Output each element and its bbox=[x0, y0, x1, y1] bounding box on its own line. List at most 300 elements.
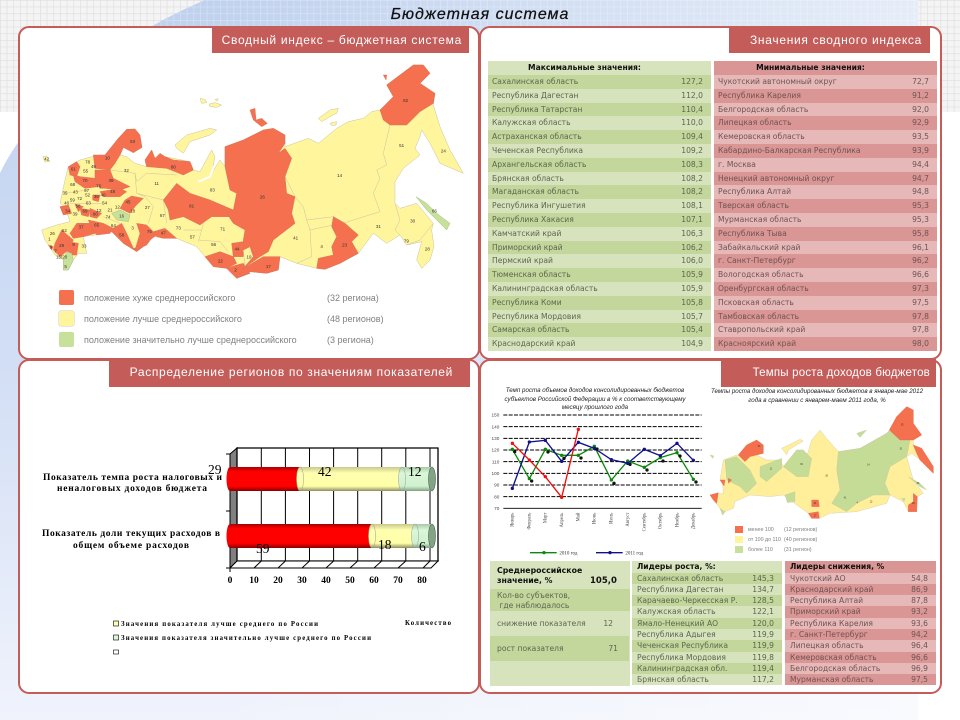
table: maximum values bbox=[488, 61, 711, 351]
table: decline leaders: 54,8 bbox=[911, 574, 928, 582]
map of Russia: composite index: 7 bbox=[54, 249, 57, 254]
map of Russia: composite index: 23 bbox=[342, 243, 348, 248]
table: minimum values: Белгородская область bbox=[718, 105, 808, 114]
table: maximum values: Приморский край bbox=[492, 243, 563, 252]
line chart: monthly revenue growth: Июль bbox=[610, 513, 615, 524]
map of Russia: composite index: 67 bbox=[160, 213, 165, 218]
table: minimum values: 92,0 bbox=[912, 105, 929, 114]
line chart: monthly revenue growth: 150 bbox=[492, 413, 500, 418]
table: maximum values: 110,0 bbox=[681, 118, 703, 127]
table: maximum values: Республика Коми bbox=[492, 298, 562, 307]
bar chart: distribution of regions: Значения показателя лучше среднего по России bbox=[121, 621, 318, 628]
table: minimum values: Забайкальский край bbox=[718, 243, 800, 252]
bar chart: distribution of regions: Значения показателя значительно лучше среднего по России bbox=[121, 635, 371, 642]
table: minimum values: г. Москва bbox=[718, 160, 756, 169]
map of Russia: composite index: 79 bbox=[404, 239, 409, 244]
table: decline leaders: г. Санкт-Петербург bbox=[790, 630, 868, 639]
chart title: growth map: года в сравнении с январем-маем 2011 года, % bbox=[748, 397, 886, 404]
table: maximum values: 105,7 bbox=[681, 312, 703, 321]
table: maximum values: Республика Ингушетия bbox=[492, 201, 586, 210]
subjects row: где наблюдалось bbox=[499, 600, 569, 610]
table: decline leaders: 93,6 bbox=[911, 619, 928, 628]
map of Russia: composite index: 30 bbox=[410, 218, 416, 223]
line chart: monthly revenue growth: 100 bbox=[492, 471, 500, 476]
increase row bbox=[490, 636, 629, 661]
map of Russia: revenue growth: 26 bbox=[825, 476, 829, 478]
map of Russia: composite index: 12 bbox=[96, 208, 102, 213]
map of Russia: revenue growth: 53 bbox=[758, 446, 761, 448]
table: maximum values: 105,9 bbox=[681, 270, 703, 279]
map of Russia: composite index: 24 bbox=[441, 149, 446, 154]
map of Russia: composite index: 64 bbox=[111, 223, 116, 228]
table: maximum values: Максимальные значения: bbox=[528, 63, 641, 72]
heading: composite index: Сводный индекс – бюджетная система bbox=[222, 33, 462, 47]
map of Russia: composite index: 11 bbox=[154, 181, 159, 186]
table: maximum values: Астраханская область bbox=[492, 132, 582, 141]
map of Russia: composite index: 22 bbox=[218, 258, 223, 263]
map of Russia: revenue growth: 66 bbox=[917, 483, 920, 485]
table: maximum values: 109,4 bbox=[681, 132, 703, 141]
table: decline leaders: Краснодарский край bbox=[790, 585, 873, 594]
table: maximum values: Тюменская область bbox=[492, 270, 571, 279]
chart title: monthly growth: месяцу прошлого года bbox=[562, 404, 628, 411]
table: decline leaders: Приморский край bbox=[790, 607, 861, 616]
table: minimum values: 96,6 bbox=[912, 270, 929, 279]
table: minimum values: Республика Алтай bbox=[718, 187, 791, 196]
line chart: monthly revenue growth: Декабрь bbox=[692, 513, 697, 529]
table: minimum values: 93,9 bbox=[912, 146, 929, 155]
map of Russia: composite index: 8 bbox=[72, 242, 75, 247]
table: maximum values: Камчатский край bbox=[492, 229, 561, 238]
table: decline leaders: Белгородская область bbox=[790, 664, 880, 673]
count: above 110: (31 регион) bbox=[784, 547, 812, 553]
map of Russia: composite index: 5 bbox=[64, 264, 67, 269]
table: growth leaders: Карачаево-Черкесская Р. bbox=[637, 596, 738, 605]
table: maximum values: Магаданская область bbox=[492, 187, 579, 196]
table: decline leaders: Чукотский АО bbox=[790, 574, 846, 582]
table: growth leaders: Калужская область bbox=[637, 607, 716, 616]
table: growth leaders: 145,3 bbox=[752, 574, 774, 582]
map of Russia: composite index: 3 bbox=[131, 225, 134, 230]
table: decline leaders: 86,9 bbox=[911, 585, 928, 594]
map of Russia: composite index: 82 bbox=[403, 98, 409, 103]
map of Russia: composite index: 39 bbox=[72, 212, 78, 217]
table: minimum values: Липецкая область bbox=[718, 118, 792, 127]
table: decline leaders: 93,2 bbox=[911, 607, 928, 616]
table: growth leaders: Калининградская обл. bbox=[637, 664, 727, 673]
bar chart: distribution of regions: 59 bbox=[256, 541, 270, 556]
table: decline leaders: Республика Карелия bbox=[790, 619, 873, 628]
swatch: below 100 bbox=[735, 526, 743, 533]
table: maximum values: 106,0 bbox=[681, 256, 703, 265]
average heading bbox=[497, 566, 582, 585]
map of Russia: composite index: 9 bbox=[50, 245, 53, 250]
map of Russia: revenue growth: 4 bbox=[857, 502, 859, 504]
map of Russia: composite index: 39 bbox=[108, 178, 114, 183]
legend count: worse: (32 региона) bbox=[327, 293, 379, 303]
legend swatch: worse bbox=[59, 290, 74, 305]
table: growth leaders: Брянская область bbox=[637, 675, 709, 684]
table: decline leaders: 96,9 bbox=[911, 664, 928, 673]
line chart: monthly revenue growth: Апрель bbox=[560, 513, 565, 527]
line chart: monthly revenue growth: Февраль bbox=[528, 513, 533, 529]
legend swatch: better bbox=[59, 311, 74, 326]
map of Russia: composite index: 47 bbox=[161, 231, 166, 236]
table: growth leaders bbox=[632, 561, 782, 685]
table: growth leaders: Республика Адыгея bbox=[637, 630, 716, 639]
map of Russia: revenue growth: 28 bbox=[912, 503, 915, 505]
map of Russia: composite index: 34 bbox=[65, 208, 71, 213]
table: growth leaders: Республика Дагестан bbox=[637, 585, 723, 594]
table: minimum values: Кабардино-Балкарская Республика bbox=[718, 146, 861, 155]
text: below 100: менее 100 bbox=[748, 527, 774, 533]
growth map legend bbox=[735, 526, 817, 553]
map of Russia: revenue growth bbox=[710, 406, 934, 519]
table: minimum values: Республика Тыва bbox=[718, 229, 787, 238]
map of Russia: composite index: 68 bbox=[70, 182, 76, 187]
line chart: monthly revenue growth: 130 bbox=[492, 436, 500, 441]
bar chart: distribution of regions: общем объеме расходов bbox=[73, 540, 189, 551]
map of Russia: composite index: 4 bbox=[320, 244, 323, 249]
table: growth leaders: 119,9 bbox=[752, 641, 774, 650]
map of Russia: composite index: 49 bbox=[91, 164, 96, 169]
map of Russia: composite index: 58 bbox=[75, 203, 81, 208]
text: 100 to 110: от 100 до 110 bbox=[748, 537, 781, 543]
line chart: monthly revenue growth bbox=[492, 413, 702, 556]
table: maximum values: Сахалинская область bbox=[492, 77, 578, 86]
map of Russia: composite index: 59 bbox=[70, 198, 75, 203]
map of Russia: composite index: 48 bbox=[110, 189, 116, 194]
chart title: monthly growth bbox=[504, 387, 686, 411]
map of Russia: composite index: 1 bbox=[48, 236, 51, 241]
table: maximum values: Архангельская область bbox=[492, 160, 586, 169]
map of Russia: composite index: 35 bbox=[62, 190, 68, 195]
table: minimum values: 91,2 bbox=[912, 91, 929, 100]
map of Russia: composite index: 45 bbox=[125, 199, 131, 204]
table: minimum values: Республика Карелия bbox=[718, 91, 801, 100]
table: decline leaders: 97,5 bbox=[911, 675, 928, 684]
count: below 100: (12 регионов) bbox=[784, 527, 817, 533]
map of Russia: composite index: 76 bbox=[96, 184, 102, 189]
swatch: above 110 bbox=[735, 546, 743, 553]
average heading: значение, % bbox=[497, 576, 552, 585]
map of Russia: composite index: 78 bbox=[85, 159, 91, 164]
line chart: monthly revenue growth: 80 bbox=[494, 494, 500, 499]
map of Russia: composite index: 12 bbox=[115, 204, 120, 209]
line chart: monthly revenue growth: 90 bbox=[494, 483, 500, 488]
heading: distribution: Распределение регионов по значениям показателей bbox=[130, 365, 453, 379]
table: minimum values: Тверская область bbox=[718, 201, 789, 210]
panel: distribution of regions bbox=[18, 359, 480, 694]
table: minimum values: Ненецкий автономный округ bbox=[718, 174, 834, 183]
table: decline leaders: Липецкая область bbox=[790, 641, 864, 650]
map of Russia: composite index: 69 bbox=[82, 209, 88, 214]
line chart: monthly revenue growth: 2010 год bbox=[559, 551, 578, 556]
bar chart: distribution of regions: 42 bbox=[318, 464, 332, 479]
map of Russia: composite index: 55 bbox=[83, 168, 89, 173]
table: maximum values: 106,3 bbox=[681, 229, 703, 238]
map of Russia: composite index: 26 bbox=[260, 195, 265, 200]
map of Russia: revenue growth: 23 bbox=[870, 502, 873, 504]
table: minimum values: 94,4 bbox=[912, 160, 929, 169]
table: minimum values: Псковская область bbox=[718, 298, 794, 307]
map of Russia: composite index: 32 bbox=[124, 168, 129, 173]
table: maximum values: 108,3 bbox=[681, 160, 703, 169]
map of Russia: composite index: 71 bbox=[220, 227, 226, 232]
table: growth leaders: 120,0 bbox=[752, 619, 774, 628]
table: decline leaders: 94,2 bbox=[911, 630, 928, 639]
table: maximum values: 108,2 bbox=[681, 174, 703, 183]
table: maximum values: 104,9 bbox=[681, 339, 703, 348]
table: maximum values: Республика Татарстан bbox=[492, 105, 582, 114]
map of Russia: composite index: 56 bbox=[211, 242, 217, 247]
bar chart: distribution of regions: Показатель темпа роста налоговых и bbox=[43, 473, 223, 483]
table: maximum values: Чеченская Республика bbox=[492, 146, 583, 155]
map of Russia: composite index: 52 bbox=[85, 192, 91, 197]
table: decline leaders: 96,4 bbox=[911, 641, 928, 650]
chart title: growth map bbox=[711, 388, 923, 404]
table: growth leaders: Сахалинская область bbox=[637, 574, 723, 582]
table: maximum values: 106,2 bbox=[681, 243, 703, 252]
map of Russia: composite index: 51 bbox=[399, 143, 405, 148]
table: maximum values: Краснодарский край bbox=[492, 339, 575, 348]
map of Russia: composite index: 26 bbox=[50, 231, 55, 236]
panel: budget revenue growth bbox=[479, 359, 942, 694]
map of Russia: composite index: 73 bbox=[176, 225, 181, 230]
table: minimum values: Чукотский автономный округ bbox=[718, 77, 837, 86]
table: minimum values: 96,2 bbox=[912, 256, 929, 265]
line chart: monthly revenue growth: Май bbox=[577, 512, 582, 521]
table: maximum values: Калининградская область bbox=[492, 284, 598, 293]
summary box: average value bbox=[490, 561, 630, 686]
map of Russia: composite index: 61 bbox=[71, 167, 76, 172]
table: minimum values: 95,8 bbox=[912, 229, 929, 238]
table: maximum values: 107,1 bbox=[681, 215, 703, 224]
legend text: worse: положение хуже среднероссийского bbox=[84, 293, 235, 303]
heading: revenue growth: Темпы роста доходов бюджетов bbox=[753, 367, 930, 379]
legend count: better: (48 регионов) bbox=[327, 314, 384, 324]
count: 100 to 110: (40 регионов) bbox=[784, 537, 817, 543]
bar chart: distribution of regions: 40 bbox=[321, 576, 331, 586]
table: decline leaders: 96,6 bbox=[911, 653, 928, 662]
bar chart: distribution of regions: 12 bbox=[408, 464, 422, 479]
map of Russia: composite index: 17 bbox=[266, 264, 271, 269]
map of Russia: composite index: 27 bbox=[145, 205, 150, 210]
map of Russia: revenue growth: 44 bbox=[814, 503, 817, 505]
swatch: 100 to 110 bbox=[735, 536, 743, 543]
table: growth leaders: 119,9 bbox=[752, 630, 774, 639]
table: growth leaders: 119,4 bbox=[752, 664, 774, 673]
panel: index values bbox=[479, 26, 942, 360]
table: minimum values: 94,8 bbox=[912, 187, 929, 196]
map of Russia: composite index: 2 bbox=[234, 267, 237, 272]
bar chart: distribution of regions: Показатель доли текущих расходов в bbox=[42, 529, 220, 539]
text: above 110: более 110 bbox=[748, 547, 773, 553]
table: maximum values: 112,0 bbox=[681, 91, 703, 100]
table: decline leaders bbox=[785, 561, 936, 685]
map of Russia: revenue growth: 82 bbox=[901, 425, 904, 427]
table: growth leaders: Ямало-Ненецкий АО bbox=[637, 619, 718, 628]
table: minimum values: Мурманская область bbox=[718, 215, 802, 224]
line chart: monthly revenue growth: Август bbox=[626, 513, 631, 527]
map of Russia: composite index: 80 bbox=[171, 164, 176, 169]
map of Russia: composite index: 72 bbox=[77, 196, 83, 201]
table: minimum values: 95,3 bbox=[912, 215, 929, 224]
table: minimum values: 92,9 bbox=[912, 118, 929, 127]
table: growth leaders: 117,2 bbox=[752, 675, 774, 684]
map of Russia: composite index: 97 bbox=[84, 188, 90, 193]
chart title: monthly growth: субъектов Российской Федерации в % к соответствующему bbox=[504, 396, 686, 402]
heading: distribution bbox=[109, 358, 470, 387]
map of Russia: revenue growth: 17 bbox=[814, 516, 817, 518]
table: minimum values: 98,0 bbox=[912, 339, 929, 348]
bar chart: distribution of regions: 80 bbox=[417, 576, 427, 586]
legend text: much better: положение значительно лучше среднероссийского bbox=[84, 335, 297, 345]
table: minimum values: Оренбургская область bbox=[718, 284, 809, 293]
table: maximum values: 105,8 bbox=[681, 298, 703, 307]
average value: 105,0 bbox=[590, 576, 617, 586]
line chart: monthly revenue growth: Январь bbox=[511, 513, 516, 527]
bar chart: distribution of regions: 50 bbox=[345, 576, 355, 586]
table: maximum values: Брянская область bbox=[492, 174, 564, 183]
table: minimum values: 97,8 bbox=[912, 325, 929, 334]
decrease row: снижение показателя bbox=[497, 619, 586, 628]
bar chart: distribution of regions: 70 bbox=[393, 576, 403, 586]
average heading: Среднероссийское bbox=[497, 566, 582, 575]
table: maximum values: 110,4 bbox=[681, 105, 703, 114]
line chart: monthly revenue growth: 2011 год bbox=[625, 551, 644, 556]
map of Russia: revenue growth: 81 bbox=[800, 464, 804, 466]
table: growth leaders: Чеченская Республика bbox=[637, 641, 728, 650]
table: decline leaders: Кемеровская область bbox=[790, 653, 877, 662]
line chart: monthly revenue growth: 110 bbox=[492, 459, 500, 464]
table: minimum values: 97,8 bbox=[912, 312, 929, 321]
heading: composite index bbox=[212, 28, 469, 53]
legend count: much better: (3 региона) bbox=[327, 335, 374, 345]
table: maximum values: Республика Дагестан bbox=[492, 91, 578, 100]
table: decline leaders: Республика Алтай bbox=[790, 596, 863, 605]
map of Russia: composite index: 33 bbox=[81, 244, 87, 249]
bar chart: distribution of regions: 0 bbox=[228, 576, 233, 586]
bar chart: distribution of regions: 18 bbox=[378, 537, 392, 552]
table: growth leaders: Республика Мордовия bbox=[637, 653, 726, 662]
table: maximum values: Самарская область bbox=[492, 325, 569, 334]
map of Russia: composite index: 28 bbox=[425, 246, 430, 251]
table: maximum values: Пермский край bbox=[492, 256, 553, 265]
map of Russia: composite index: 18 bbox=[130, 208, 136, 213]
bar chart: distribution of regions: 60 bbox=[369, 576, 379, 586]
table: maximum values: 105,4 bbox=[681, 325, 703, 334]
table: growth leaders: 122,1 bbox=[752, 607, 774, 616]
map of Russia: composite index: 19 bbox=[246, 255, 252, 260]
subjects row bbox=[490, 588, 630, 611]
map of Russia: revenue growth: 51 bbox=[900, 448, 903, 450]
table: minimum values: 97,3 bbox=[912, 284, 929, 293]
legend swatch: much better bbox=[59, 332, 74, 347]
table: minimum values: 72,7 bbox=[912, 77, 929, 86]
chart title: growth map: Темпы роста доходов консолидированных бюджетов в январе-мае 2012 bbox=[711, 388, 923, 395]
subjects row: Кол-во субъектов, bbox=[497, 590, 570, 600]
table: minimum values bbox=[714, 61, 937, 351]
line chart: monthly revenue growth: Март bbox=[544, 513, 549, 523]
map of Russia: composite index: 40 bbox=[64, 201, 70, 206]
map of Russia: composite index: 36 bbox=[94, 194, 99, 199]
table: decline leaders: 87,8 bbox=[911, 596, 928, 605]
increase row: 71 bbox=[608, 644, 618, 653]
map of Russia: revenue growth: 14 bbox=[867, 465, 870, 467]
map of Russia: composite index: 10 bbox=[105, 155, 110, 160]
table: growth leaders: 134,7 bbox=[752, 585, 774, 594]
table: growth leaders: 128,5 bbox=[752, 596, 774, 605]
map of Russia: composite index: 66 bbox=[432, 209, 437, 214]
decrease row: 12 bbox=[603, 619, 613, 628]
table: maximum values: Республика Хакасия bbox=[492, 215, 574, 224]
table: maximum values: 109,2 bbox=[681, 146, 703, 155]
map of Russia: composite index: 65 bbox=[94, 223, 100, 228]
line chart: monthly revenue growth: 120 bbox=[492, 448, 500, 453]
heading: index values bbox=[729, 28, 930, 53]
map of Russia: composite index: 31 bbox=[376, 224, 381, 229]
map of Russia: composite index: 70 bbox=[82, 178, 88, 183]
table: minimum values: Вологодская область bbox=[718, 270, 804, 279]
map of Russia: composite index bbox=[42, 64, 464, 279]
table: minimum values: 95,3 bbox=[912, 201, 929, 210]
bar chart: distribution of regions: 20 bbox=[273, 576, 283, 586]
map of Russia: composite index: 40 bbox=[100, 193, 106, 198]
map of Russia: revenue growth: 11 bbox=[770, 468, 773, 470]
bar chart: distribution of regions: Количество bbox=[405, 620, 452, 627]
table: decline leaders: Мурманская область bbox=[790, 675, 874, 684]
line chart: monthly revenue growth: Октябрь bbox=[659, 513, 664, 529]
table: growth leaders: 119,8 bbox=[752, 653, 774, 662]
line chart: monthly revenue growth: 140 bbox=[492, 424, 500, 429]
bar chart: distribution of regions: неналоговых доходов бюджета bbox=[57, 483, 207, 494]
bar chart: distribution of regions: 30 bbox=[297, 576, 307, 586]
table: maximum values: 105,9 bbox=[681, 284, 703, 293]
map of Russia: composite index: 57 bbox=[190, 235, 195, 240]
table: minimum values: 96,1 bbox=[912, 243, 929, 252]
map of Russia: composite index: 15/20 bbox=[56, 255, 68, 260]
map of Russia: composite index: 43 bbox=[73, 189, 78, 194]
table: maximum values: Калужская область bbox=[492, 118, 571, 127]
panel: composite index map bbox=[18, 26, 480, 360]
map of Russia: composite index: 83 bbox=[210, 188, 215, 193]
map of Russia: composite index: 81 bbox=[189, 203, 195, 208]
map of Russia: composite index: 75 bbox=[147, 229, 152, 234]
line chart: monthly revenue growth: Июнь bbox=[593, 513, 598, 524]
table: maximum values: 108,2 bbox=[681, 187, 703, 196]
map of Russia: composite index: 54 bbox=[102, 200, 108, 205]
table: maximum values: 127,2 bbox=[681, 77, 703, 86]
bar chart: distribution of regions: 29 bbox=[208, 462, 222, 477]
chart title: monthly growth: Темп роста объемов доходов консолидированных бюджетов bbox=[506, 387, 684, 394]
map of Russia: composite index: 60 bbox=[93, 211, 98, 216]
bar chart: distribution of regions bbox=[42, 446, 452, 654]
table: minimum values: Минимальные значения: bbox=[756, 63, 865, 72]
table: minimum values: Тамбовская область bbox=[718, 312, 799, 321]
table: minimum values: 94,7 bbox=[912, 174, 929, 183]
table: minimum values: Кемеровская область bbox=[718, 132, 805, 141]
increase row: рост показателя bbox=[497, 644, 564, 653]
heading: revenue growth bbox=[721, 359, 936, 387]
table: growth leaders: Лидеры роста, %: bbox=[637, 562, 716, 571]
map of Russia: composite index: 62 bbox=[62, 228, 67, 233]
table: maximum values: Республика Мордовия bbox=[492, 312, 581, 321]
map legend bbox=[58, 290, 384, 347]
table: minimum values: Красноярский край bbox=[718, 339, 796, 348]
map of Russia: revenue growth: 41 bbox=[844, 497, 847, 499]
map of Russia: composite index: 44 bbox=[234, 246, 240, 251]
